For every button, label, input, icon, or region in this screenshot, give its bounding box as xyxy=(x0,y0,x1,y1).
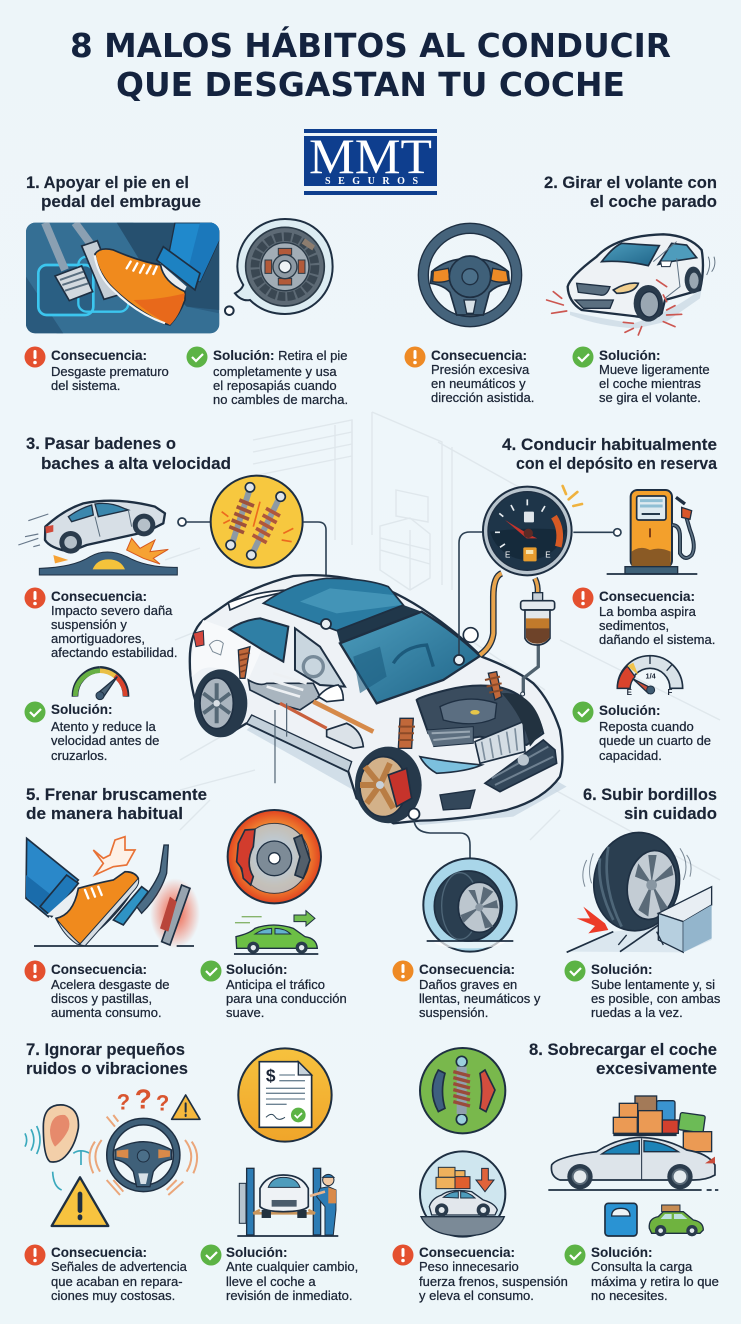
solution 2 xyxy=(572,346,710,405)
icon: suspension shock absorbers xyxy=(211,476,303,568)
section 7 heading: 7. Ignorar pequeños xyxy=(26,1040,185,1059)
consequence 1 xyxy=(24,346,169,393)
solution 1: no cambles de marcha. xyxy=(213,392,348,407)
solution 7: Ante cualquier cambio, xyxy=(226,1259,358,1274)
icon: fuel gauge on reserve: E xyxy=(505,551,510,560)
icon: steering wheel xyxy=(423,228,517,322)
consequence 6: suspensión. xyxy=(419,1005,488,1020)
section 1 heading: pedal del embrague xyxy=(41,192,201,211)
consequence 3 xyxy=(24,588,177,660)
consequence 1: Desgaste prematuro xyxy=(51,364,169,379)
consequence 5: Acelera desgaste de xyxy=(51,977,170,992)
solution 5: Solución: xyxy=(226,962,288,977)
consequence 4: sedimentos, xyxy=(599,618,669,633)
consequence 5: aumenta consumo. xyxy=(51,1005,162,1020)
consequence 2: Presión excesiva xyxy=(431,362,530,377)
solution 1: Solución: Retira el pie xyxy=(213,348,347,363)
solution 2: Solución: xyxy=(599,348,660,363)
section 6 heading: sin cuidado xyxy=(624,804,717,823)
icon: quarter tank gauge: E xyxy=(627,688,633,697)
consequence 5: Consecuencia: xyxy=(51,962,147,977)
consequence 8: Consecuencia: xyxy=(419,1245,515,1260)
icon: quarter tank gauge: F xyxy=(668,688,673,697)
solution 8: Solución: xyxy=(591,1245,652,1260)
icon: worn clutch disc in thought bubble xyxy=(225,219,333,315)
solution 5: Anticipa el tráfico xyxy=(226,977,325,992)
icon: speed gauge xyxy=(75,669,126,700)
consequence 7: Señales de advertencia xyxy=(51,1259,188,1274)
solution 7: revisión de inmediato. xyxy=(226,1288,352,1303)
title: QUE DESGASTAN TU COCHE xyxy=(116,65,625,104)
consequence 2: dirección asistida. xyxy=(431,390,534,405)
section 3 heading: baches a alta velocidad xyxy=(41,454,231,473)
consequence 4: Consecuencia: xyxy=(599,589,695,604)
solution 7: lleve el coche a xyxy=(226,1274,316,1289)
solution 3: velocidad antes de xyxy=(51,733,159,748)
consequence 3: afectando estabilidad. xyxy=(51,645,177,660)
section 1 heading: 1. Apoyar el pie en el xyxy=(26,173,189,192)
consequence 3: amortiguadores, xyxy=(51,631,145,646)
solution 7 xyxy=(200,1244,358,1303)
consequence 8 xyxy=(392,1244,568,1303)
solution 6: Solución: xyxy=(591,962,652,977)
solution 3: Solución: xyxy=(51,702,112,717)
illustration: fuel pump with sediment xyxy=(607,490,697,574)
solution 4: quede un cuarto de xyxy=(599,733,711,748)
solution 6: ruedas a la vez. xyxy=(591,1005,683,1020)
consequence 7: ciones muy costosas. xyxy=(51,1288,175,1303)
icon: repair invoice: $ xyxy=(266,1066,276,1086)
icon: fuel gauge on reserve xyxy=(483,487,572,575)
solution 5: para una conducción xyxy=(226,991,347,1006)
section 5 heading xyxy=(26,785,207,823)
consequence 2: en neumáticos y xyxy=(431,376,526,391)
connector: bump to suspension xyxy=(178,518,212,526)
logo: MMT Seguros: MMT xyxy=(309,128,432,184)
section 5 heading: de manera habitual xyxy=(26,804,183,823)
consequence 7 xyxy=(24,1244,188,1303)
solution 2: el coche mientras xyxy=(599,376,701,391)
solution 2: se gira el volante. xyxy=(599,390,701,405)
consequence 1: Consecuencia: xyxy=(51,348,147,363)
connector: suspension to car xyxy=(303,522,326,619)
fuel hoses and filter xyxy=(480,573,555,696)
section 4 heading: 4. Conducir habitualmente xyxy=(502,435,717,454)
solution 5 xyxy=(200,960,347,1020)
section 6 heading xyxy=(583,785,717,823)
gauge alert rays xyxy=(563,486,621,536)
icon: spring and brake pads xyxy=(420,1048,505,1133)
title: 8 MALOS HÁBITOS AL CONDUCIR xyxy=(70,25,671,65)
illustration: green car moving smoothly xyxy=(234,911,318,954)
solution 8: máxima y retira lo que xyxy=(591,1274,719,1289)
icon: quarter tank gauge xyxy=(617,656,683,697)
solution 6: Sube lentamente y, si xyxy=(591,977,715,992)
solution 4: capacidad. xyxy=(599,748,662,763)
consequence 6 xyxy=(392,960,541,1020)
icon: fuel gauge on reserve: E xyxy=(545,551,551,560)
illustration: ear, vibrating wheel and warnings xyxy=(25,1083,200,1226)
connector: suspension node on car xyxy=(321,619,331,629)
solution 6: es posible, con ambas xyxy=(591,991,721,1006)
consequence 3: Consecuencia: xyxy=(51,589,147,604)
icon: quarter tank gauge: 1/4 xyxy=(646,672,657,681)
section 7 heading xyxy=(26,1040,188,1078)
logo: MMT Seguros: SEGUROS xyxy=(325,176,418,187)
consequence 7: Consecuencia: xyxy=(51,1245,147,1260)
connector: fuel gauge to car xyxy=(454,532,484,665)
section 4 heading: con el depósito en reserva xyxy=(516,454,718,473)
consequence 5: discos y pastillas, xyxy=(51,991,152,1006)
solution 3 xyxy=(24,702,159,763)
icon: overloaded car in circle xyxy=(420,1151,505,1237)
illustration: car over speed bump xyxy=(18,501,177,575)
consequence 7: que acaban en repara- xyxy=(51,1274,183,1289)
section 1 heading xyxy=(26,173,201,211)
section 8 heading: excesivamente xyxy=(596,1059,717,1078)
solution 1: completamente y usa xyxy=(213,364,337,379)
consequence 2 xyxy=(404,346,534,405)
illustration: ear, vibrating wheel and warnings: ? xyxy=(156,1091,169,1116)
consequence 8: fuerza frenos, suspensión xyxy=(419,1274,568,1289)
consequence 5 xyxy=(24,960,170,1020)
solution 3: cruzarlos. xyxy=(51,748,107,763)
section 8 heading: 8. Sobrecargar el coche xyxy=(529,1040,717,1059)
consequence 8: Peso innecesario xyxy=(419,1259,519,1274)
icon: repair invoice xyxy=(238,1048,332,1142)
solution 3: Atento y reduce la xyxy=(51,719,157,734)
solution 5: suave. xyxy=(226,1005,264,1020)
consequence 8: y eleva el consumo. xyxy=(419,1288,534,1303)
illustration: foot braking hard xyxy=(26,837,200,948)
section 3 heading: 3. Pasar badenes o xyxy=(26,434,176,453)
illustration: ear, vibrating wheel and warnings: ? xyxy=(117,1089,130,1114)
consequence 2: Consecuencia: xyxy=(431,348,527,363)
consequence 6: Daños graves en xyxy=(419,977,517,992)
consequence 6: Consecuencia: xyxy=(419,962,515,977)
illustration: overloaded car with boxes xyxy=(548,1096,718,1190)
section 5 heading: 5. Frenar bruscamente xyxy=(26,785,207,804)
solution 4: Solución: xyxy=(599,703,660,718)
consequence 1: del sistema. xyxy=(51,378,120,393)
icon: green car with roof load xyxy=(649,1205,703,1236)
solution 8: no necesites. xyxy=(591,1288,668,1303)
illustration: foot on clutch pedal xyxy=(26,223,219,333)
consequence 4: La bomba aspira xyxy=(599,604,697,619)
section 8 heading xyxy=(529,1040,717,1078)
illustration: tire hitting curb xyxy=(567,826,712,952)
illustration: car on lift with mechanic xyxy=(237,1168,338,1236)
solution 6 xyxy=(564,960,721,1020)
section 2 heading xyxy=(544,173,717,211)
section 4 heading xyxy=(502,435,718,473)
solution 1 xyxy=(186,346,348,407)
consequence 6: llentas, neumáticos y xyxy=(419,991,541,1006)
solution 7: Solución: xyxy=(226,1245,288,1260)
solution 8 xyxy=(564,1244,719,1303)
solution 2: Mueve ligeramente xyxy=(599,362,710,377)
icon: damaged tire xyxy=(423,858,517,952)
section 2 heading: el coche parado xyxy=(590,192,717,211)
central car cutaway illustration xyxy=(190,575,567,825)
title xyxy=(70,25,671,104)
solution 1: el reposapiás cuando xyxy=(213,378,337,393)
consequence 4 xyxy=(572,588,715,647)
solution 4 xyxy=(572,702,711,763)
consequence 3: Impacto severo daña xyxy=(51,603,173,618)
section 2 heading: 2. Girar el volante con xyxy=(544,173,717,192)
section 7 heading: ruidos o vibraciones xyxy=(26,1059,188,1078)
connector: car to tire xyxy=(408,808,470,860)
icon: weighing scale xyxy=(605,1203,637,1236)
consequence 4: dañando el sistema. xyxy=(599,632,715,647)
solution 8: Consulta la carga xyxy=(591,1259,693,1274)
solution 4: Reposta cuando xyxy=(599,719,694,734)
section 3 heading xyxy=(26,434,231,473)
illustration: ear, vibrating wheel and warnings: ? xyxy=(135,1083,152,1114)
icon: overheated brake disc xyxy=(228,810,321,903)
consequence 3: suspensión y xyxy=(51,617,127,632)
section 6 heading: 6. Subir bordillos xyxy=(583,785,717,804)
illustration: car turning while stopped xyxy=(547,234,715,335)
